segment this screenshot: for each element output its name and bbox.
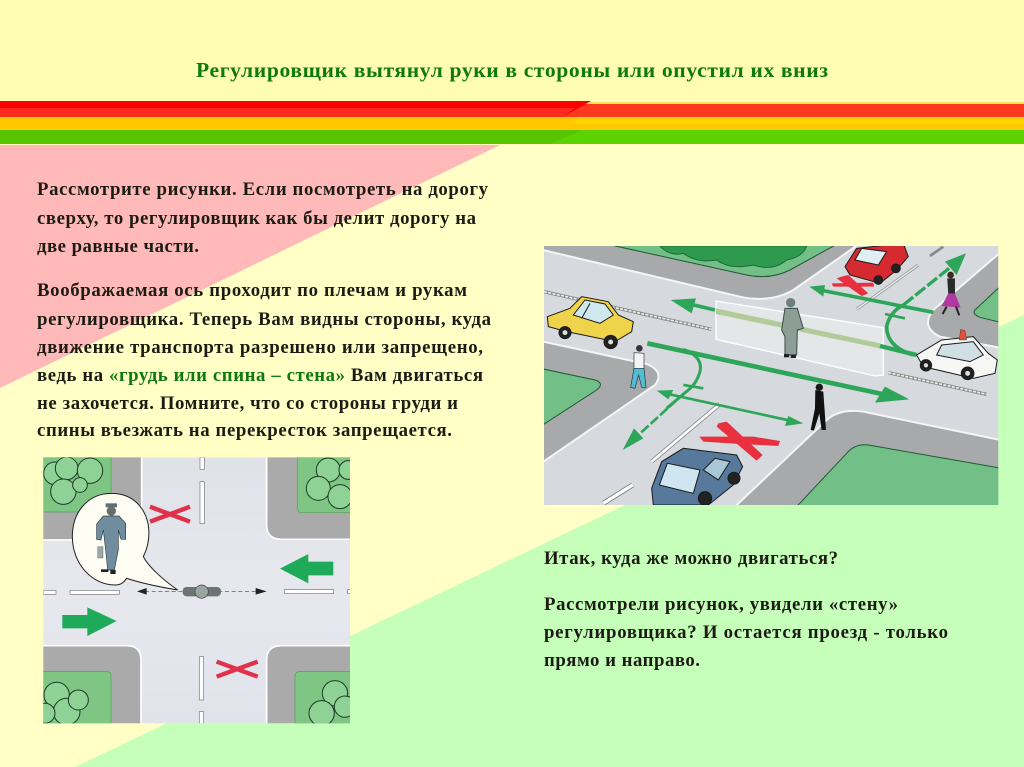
speech bubble with traffic officer xyxy=(72,493,178,590)
officer figure xyxy=(97,503,126,574)
text block: imaginary axis paragraph: движение транспорта разрешено или запрещено, xyxy=(37,337,483,358)
text block: answer: прямо и направо. xyxy=(544,650,700,671)
green arrows: permitted directions xyxy=(637,265,953,437)
red crosses: forbidden xyxy=(150,507,258,677)
car: red xyxy=(845,243,908,284)
trees xyxy=(660,246,807,267)
text block: imaginary axis paragraph: ведь на «грудь или спина – стена» Вам двигаться xyxy=(37,365,483,386)
trees xyxy=(35,457,358,726)
text block: intro paragraph: сверху, то регулировщик как бы делит дорогу на xyxy=(37,208,477,229)
pedestrian: woman in pink skirt xyxy=(942,272,961,315)
glass wall behind the traffic officer xyxy=(716,301,883,376)
background: pink triangle xyxy=(0,145,500,388)
text block: imaginary axis paragraph: спины въезжать на перекресток запрещается. xyxy=(37,420,452,441)
green arrow: right xyxy=(62,607,117,636)
text block: imaginary axis paragraph xyxy=(37,280,492,441)
traffic officer from above with arm axis xyxy=(137,585,267,598)
text block: imaginary axis paragraph: не захочется. Помните, что со стороны груди и xyxy=(37,393,458,414)
text block: answer xyxy=(544,594,948,671)
sidewalk corners xyxy=(540,240,1003,507)
grass areas xyxy=(40,453,353,727)
traffic light colour stripes xyxy=(0,101,1024,144)
text block: answer: регулировщика? И остается проезд - только xyxy=(544,622,948,643)
text block: question: Итак, куда же можно двигаться? xyxy=(544,548,838,569)
grass areas xyxy=(540,243,1002,507)
sidewalk corners xyxy=(40,453,353,727)
lane markings xyxy=(544,247,987,503)
text block: intro paragraph: две равные части. xyxy=(37,236,199,257)
illustration: intersection in perspective xyxy=(540,240,1003,507)
car: white police xyxy=(917,329,997,380)
pedestrian: woman in black xyxy=(811,384,826,431)
title: Регулировщик вытянул руки в стороны или опустил их вниз xyxy=(196,58,828,82)
pedestrian: man in blue jeans xyxy=(631,345,646,388)
lane markings xyxy=(43,457,351,725)
green arrow: left xyxy=(280,554,333,583)
text block: intro paragraph xyxy=(37,179,489,257)
red crosses: forbidden xyxy=(699,275,874,461)
car: yellow xyxy=(547,297,633,349)
text block: imaginary axis paragraph: регулировщика. Теперь Вам видны стороны, куда xyxy=(37,309,492,330)
illustration: intersection from above xyxy=(35,453,358,727)
traffic officer xyxy=(782,298,803,358)
car: blue xyxy=(652,448,743,505)
background: green triangle xyxy=(75,315,1024,767)
text block: answer: Рассмотрели рисунок, увидели «стену» xyxy=(544,594,898,615)
text block: intro paragraph: Рассмотрите рисунки. Если посмотреть на дорогу xyxy=(37,179,489,200)
text block: imaginary axis paragraph: Воображаемая ось проходит по плечам и рукам xyxy=(37,280,467,301)
